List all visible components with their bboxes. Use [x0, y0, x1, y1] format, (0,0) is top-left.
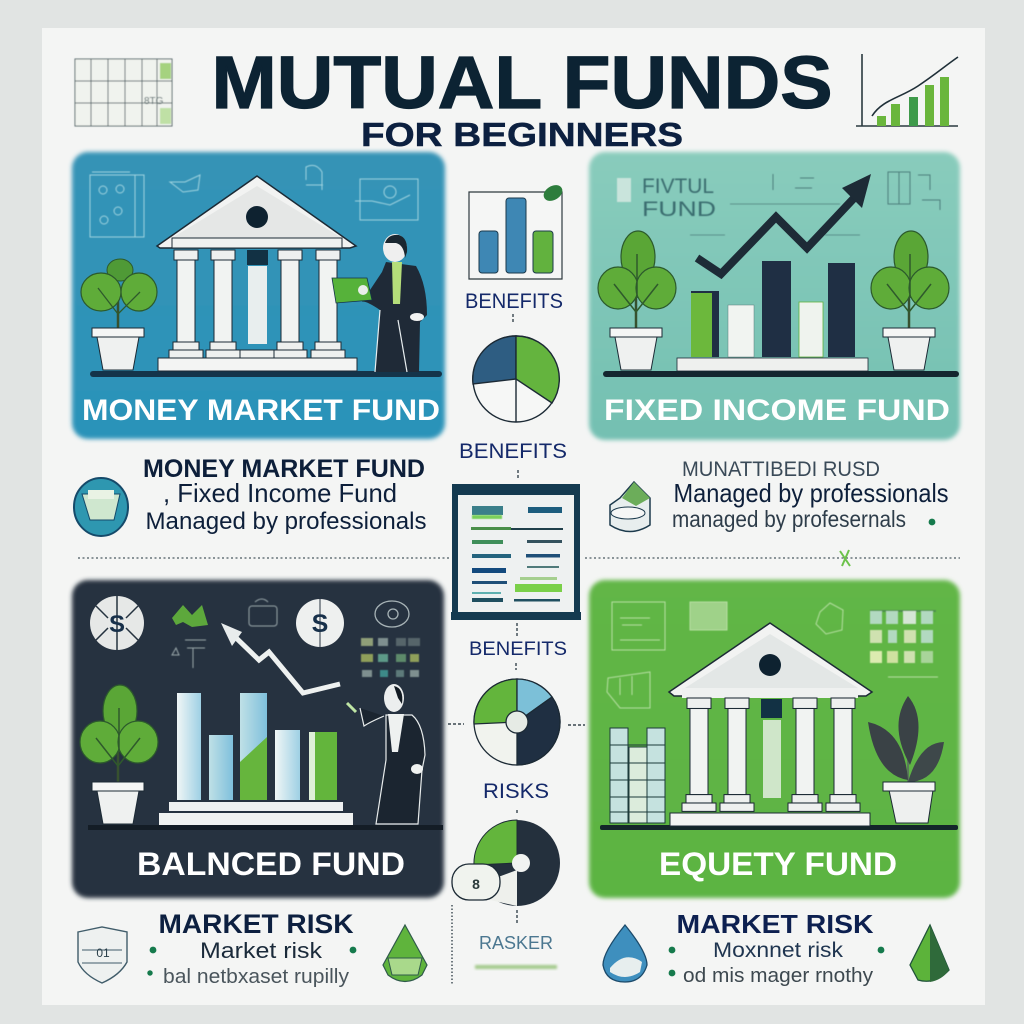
bullet dot — [929, 519, 935, 525]
panel background — [589, 152, 960, 440]
panel label: MONEY MARKET FUND — [82, 394, 440, 427]
floor — [600, 825, 958, 830]
icon: green gem drop — [910, 925, 949, 982]
panel: equity fund — [589, 580, 960, 898]
icon: basket coin — [74, 478, 128, 536]
icon: calendar grid — [75, 59, 172, 126]
title: MUTUAL FUNDS — [212, 41, 832, 124]
money market description: MONEY MARKET FUND — [143, 455, 425, 483]
center: table document — [451, 484, 581, 620]
money market description: , Fixed Income Fund — [163, 478, 397, 508]
right market risk text: MARKET RISK — [676, 909, 874, 939]
icon: blue drop — [603, 925, 647, 982]
green mark icon — [172, 605, 208, 627]
floor — [603, 371, 959, 377]
book stacks — [610, 728, 665, 823]
icon: shield chart: 01 — [96, 946, 110, 960]
center: risk pie with coin: 8 — [472, 876, 480, 892]
declining arrow — [221, 623, 340, 693]
panel label: EQUETY FUND — [659, 846, 897, 882]
center: benefits label lower: BENEFITS — [469, 639, 567, 660]
small sketches — [172, 599, 277, 668]
right market risk text: Moxnnet risk — [713, 939, 844, 962]
floor — [88, 825, 443, 830]
panel: balanced fund — [72, 580, 444, 898]
presenter figure — [347, 684, 425, 824]
faded label: FIVTUL — [642, 175, 714, 198]
coin right: S — [312, 610, 328, 638]
benefits label: BENEFITS — [459, 440, 567, 463]
mini data grid — [361, 638, 420, 677]
coin right — [296, 599, 344, 647]
right description — [672, 458, 948, 532]
icon: jar — [610, 482, 650, 532]
left market risk text — [158, 909, 354, 988]
right market risk text: od mis mager rnothy — [683, 965, 873, 987]
left market risk text: Market risk — [200, 938, 323, 963]
sketch icons — [90, 165, 418, 237]
icon: calendar grid: 8TG — [144, 96, 164, 107]
icon: growth chart — [856, 54, 958, 126]
sketch marks — [617, 172, 940, 235]
icon: green drop cup — [383, 925, 427, 982]
floor — [90, 371, 442, 377]
panel: fixed income fund — [589, 152, 960, 440]
right bullets — [669, 947, 884, 976]
panel label: BALNCED FUND — [137, 846, 405, 882]
trend arrow — [697, 174, 871, 274]
right description: MUNATTIBEDI RUSD — [682, 458, 880, 481]
money market description: Managed by professionals — [146, 508, 426, 535]
left bullets — [147, 947, 356, 976]
panel: money market fund — [72, 152, 445, 439]
risks label: RISKS — [483, 780, 549, 803]
sketch icons — [607, 602, 938, 708]
bar chart — [677, 261, 868, 371]
dark plant — [868, 696, 944, 823]
temple — [157, 176, 357, 371]
blurred green line — [475, 965, 557, 969]
temple — [669, 623, 872, 826]
plant — [81, 259, 157, 370]
right plant — [871, 231, 949, 370]
plant — [80, 685, 158, 824]
center: pie chart top — [473, 336, 559, 422]
icon grid — [870, 610, 936, 663]
left plant — [598, 231, 676, 370]
bar chart — [159, 693, 353, 825]
person with green note — [332, 234, 427, 372]
green mark — [840, 550, 850, 566]
icon: shield chart — [78, 927, 127, 983]
faded label: FUND — [642, 198, 716, 221]
faded label — [642, 175, 716, 221]
center: risk pie with coin — [452, 820, 560, 906]
benefits label: BENEFITS — [465, 290, 563, 313]
center: ring pie — [474, 679, 560, 765]
panel background — [589, 580, 960, 898]
right description: Managed by professionals — [674, 478, 948, 508]
money market description — [143, 455, 426, 535]
panel background — [72, 580, 444, 898]
center: benefits bar chart — [469, 182, 565, 279]
coin left — [90, 596, 144, 650]
left market risk text: MARKET RISK — [158, 909, 354, 939]
dotted dividers — [78, 557, 960, 559]
panel background — [72, 152, 445, 439]
eye icon — [375, 601, 409, 627]
rasker label: RASKER — [479, 933, 553, 953]
coin left: S — [109, 611, 125, 638]
right description: managed by profesernals — [672, 506, 906, 532]
left market risk text: bal netbxaset rupilly — [163, 966, 349, 988]
right market risk text — [676, 909, 874, 987]
connector ticks — [448, 314, 585, 985]
subtitle: FOR BEGINNERS — [361, 116, 683, 153]
panel label: FIXED INCOME FUND — [604, 394, 950, 427]
